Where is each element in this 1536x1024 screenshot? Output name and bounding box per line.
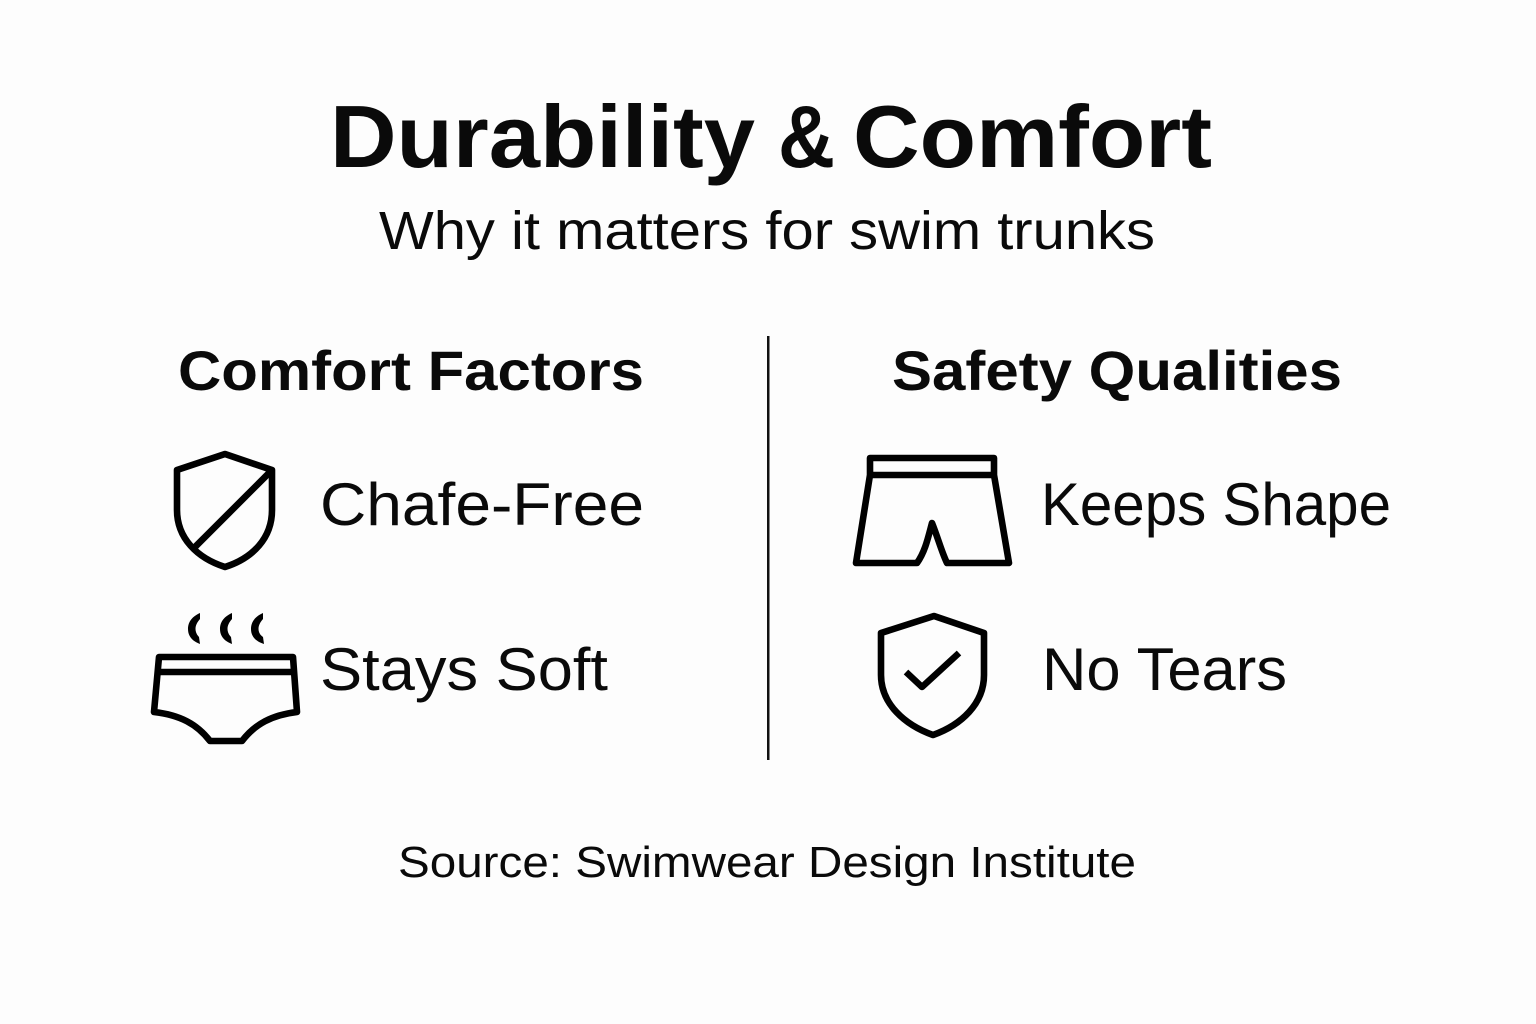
title: & — [778, 87, 835, 186]
label: keeps shape: Keeps Shape — [1041, 471, 1391, 538]
divider — [767, 336, 770, 760]
title: Durability — [330, 87, 755, 186]
label: no tears: No Tears — [1042, 636, 1287, 703]
icon: briefs — [154, 657, 297, 741]
icon: steam — [188, 613, 264, 644]
panel: safety qualities — [856, 339, 1391, 735]
heading: comfort factors: Comfort Factors — [178, 339, 644, 402]
icon: shield with check — [881, 616, 984, 735]
title — [330, 87, 1212, 186]
icon: briefs with steam — [154, 613, 297, 741]
title: Comfort — [853, 87, 1212, 186]
label: stays soft: Stays Soft — [320, 636, 608, 703]
panel: comfort factors — [154, 339, 644, 741]
subtitle: Why it matters for swim trunks — [379, 201, 1155, 261]
icon: slashed shield — [177, 454, 272, 567]
icon: swim shorts — [856, 458, 1009, 563]
label: chafe-free: Chafe-Free — [320, 471, 644, 538]
source note: Source: Swimwear Design Institute — [398, 838, 1136, 887]
heading: safety qualities: Safety Qualities — [892, 339, 1342, 402]
